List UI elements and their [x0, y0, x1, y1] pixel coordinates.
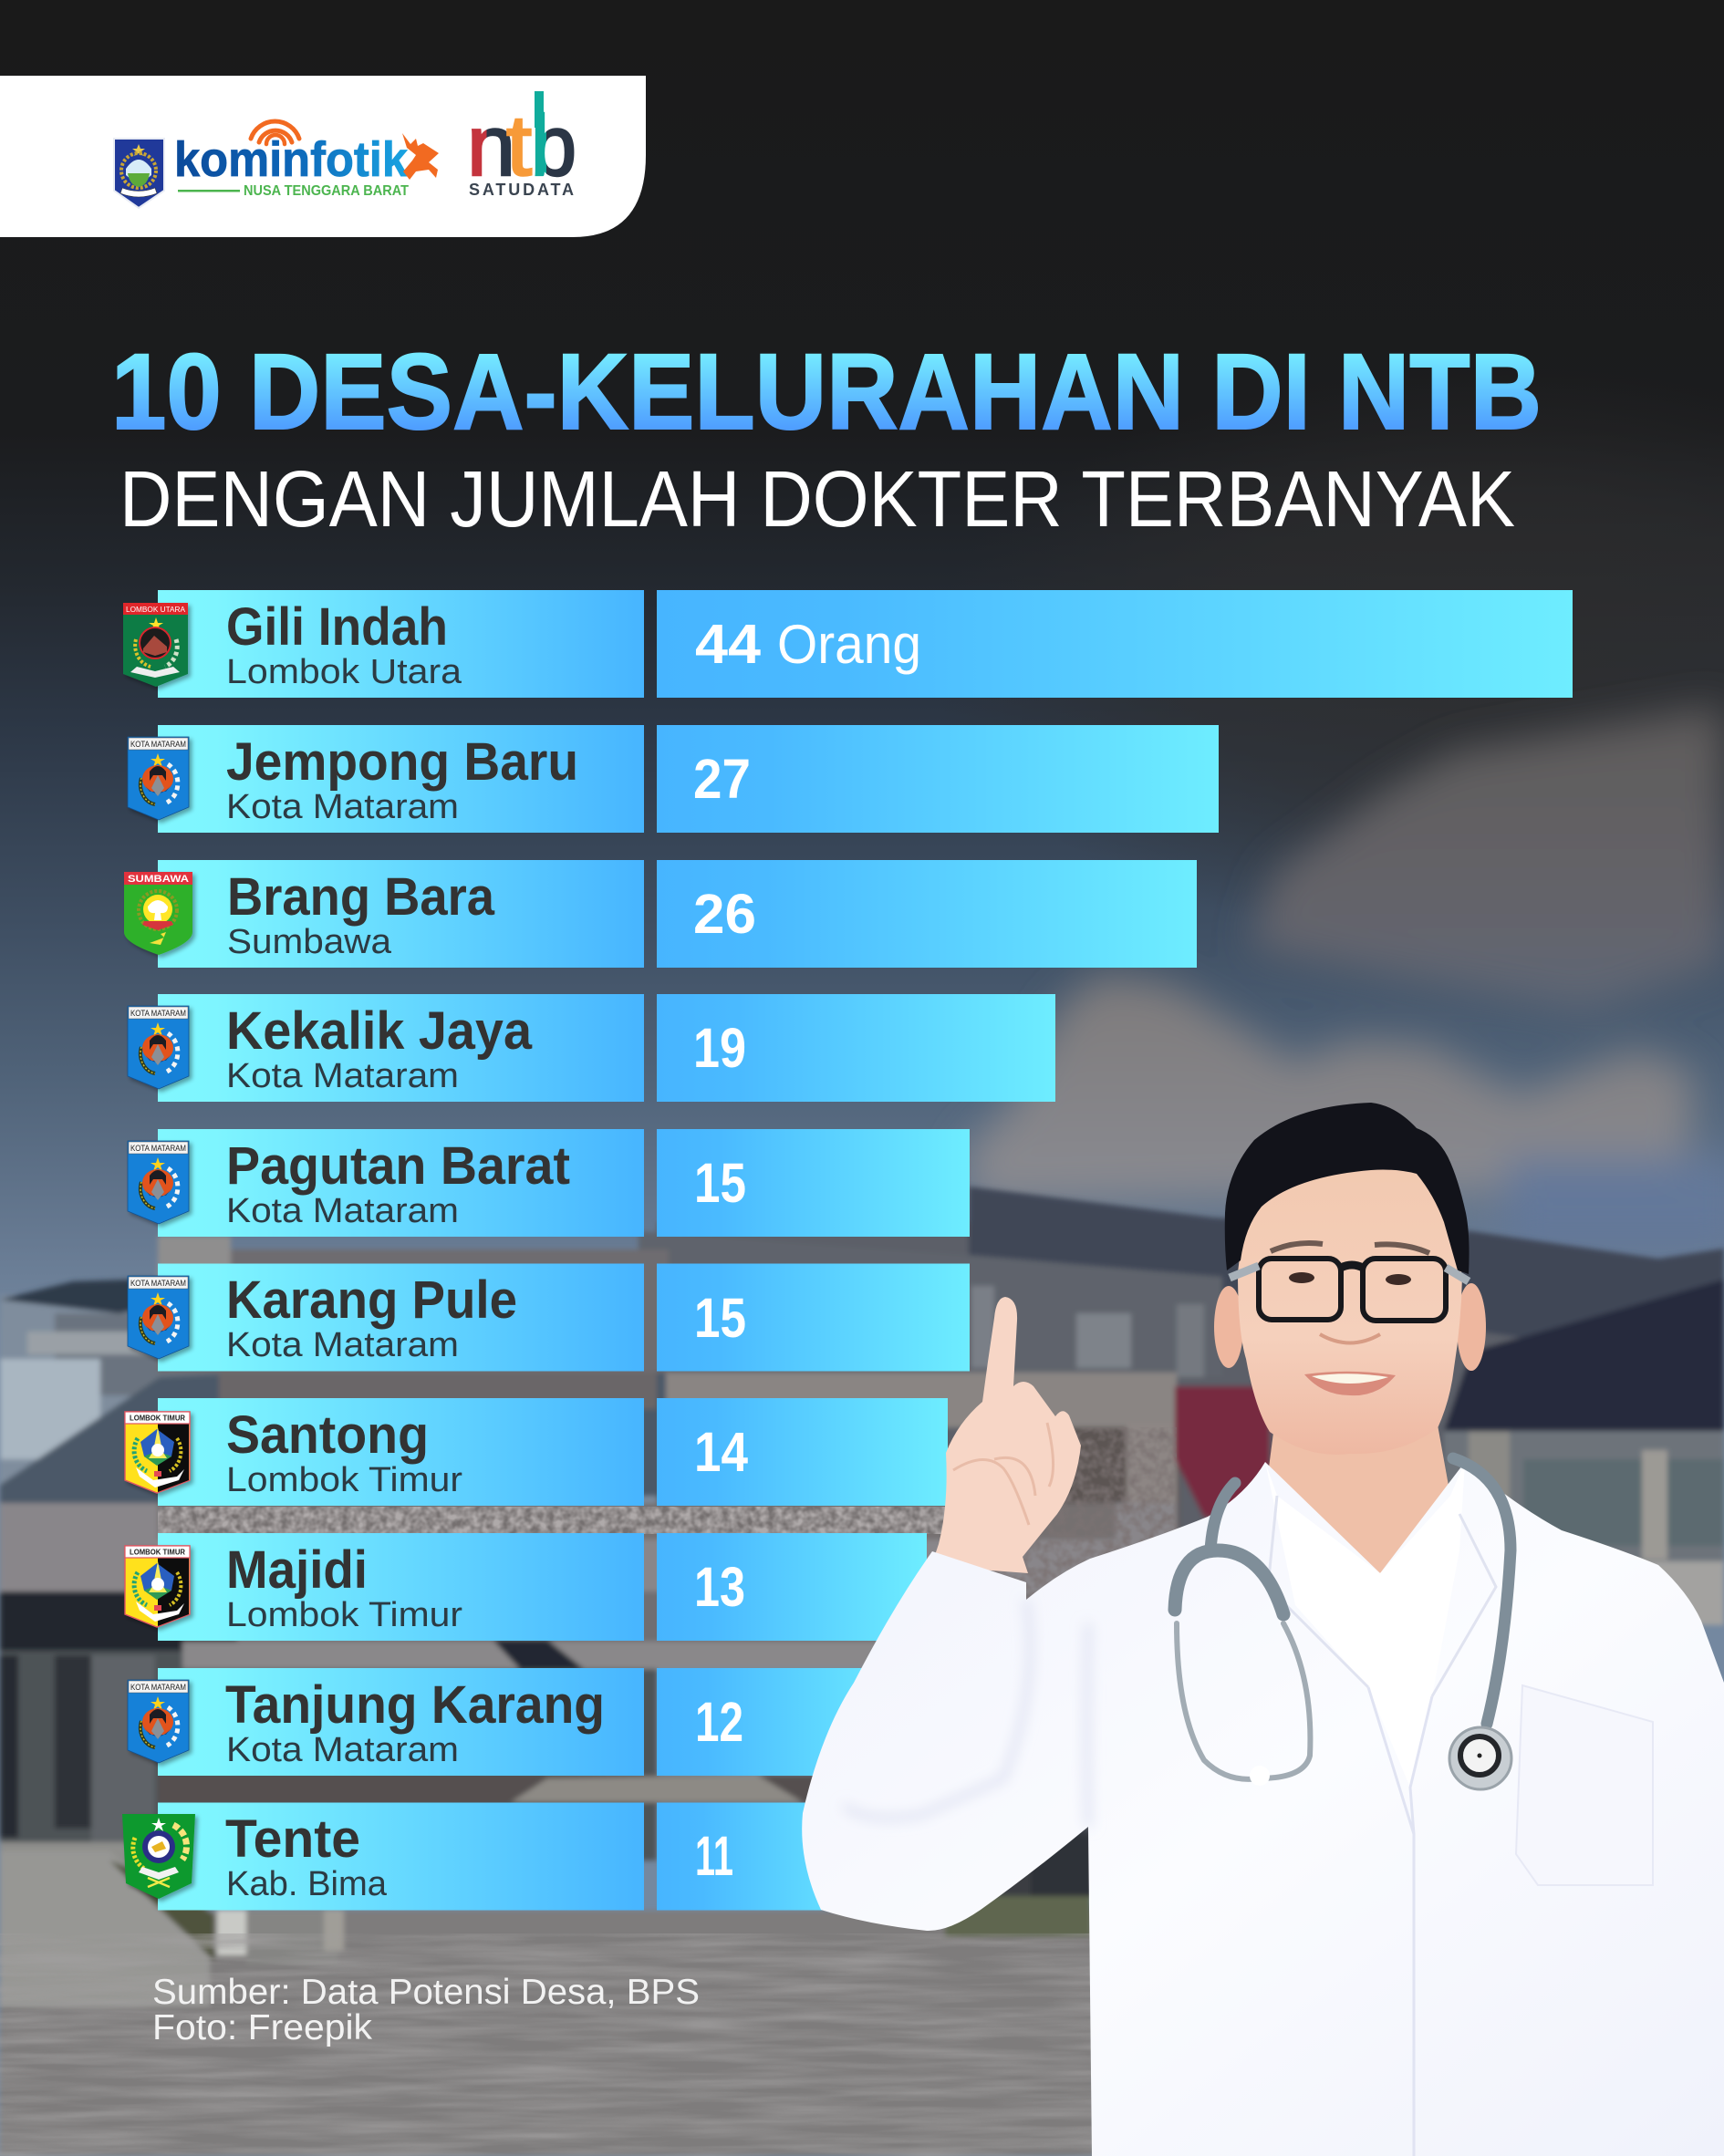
row 2: Jempong Baru	[128, 725, 1219, 833]
logo: ntb satudata: t	[506, 98, 532, 193]
value: 12	[695, 1691, 743, 1753]
eyes	[1289, 1272, 1314, 1283]
value: 44	[695, 613, 761, 675]
icon: Kota Mataram emblem: KOTA MATARAM	[130, 1009, 186, 1019]
icon: Kota Mataram emblem	[128, 1141, 189, 1224]
icon: Kota Mataram emblem: KOTA MATARAM	[130, 740, 186, 750]
icon: Kota Mataram emblem	[128, 737, 189, 820]
sublabel: Sumbawa	[227, 923, 392, 961]
row 5: Pagutan Barat	[128, 1129, 970, 1237]
stethoscope	[1175, 1458, 1511, 1789]
logo: ntb satudata: n	[467, 98, 515, 193]
icon: Lombok Timur emblem: LOMBOK TIMUR	[130, 1414, 185, 1423]
hand	[931, 1297, 1081, 1573]
value: 15	[694, 1287, 746, 1349]
icon: Kota Mataram emblem	[128, 1006, 189, 1089]
title: 10 DESA-KELURAHAN DI NTB	[111, 332, 1542, 452]
sleeve shading	[844, 1600, 1088, 1827]
glasses	[1230, 1259, 1469, 1321]
icon: Kota Mataram emblem: KOTA MATARAM	[130, 1144, 186, 1154]
header panel with logos	[0, 76, 646, 237]
row 9: Tanjung Karang	[128, 1668, 907, 1776]
logo: ntb satudata: b	[531, 98, 576, 193]
value: 13	[694, 1556, 745, 1618]
sublabel: Kota Mataram	[226, 1731, 459, 1769]
icon: NTB province emblem	[114, 139, 164, 208]
value: 27	[693, 748, 751, 810]
label: Gili Indah	[226, 597, 448, 657]
source text	[152, 1973, 700, 2047]
sublabel: Lombok Timur	[226, 1461, 462, 1499]
row 10: Tente	[122, 1802, 886, 1910]
source text: Sumber: Data Potensi Desa, BPS	[152, 1973, 700, 2012]
ears	[1214, 1286, 1243, 1368]
doctor figure	[802, 1103, 1724, 2156]
sublabel: Kota Mataram	[226, 1192, 459, 1230]
label: Pagutan Barat	[226, 1136, 570, 1196]
logo: ntb satudata: SATUDATA	[469, 181, 574, 199]
value: 14	[694, 1421, 748, 1483]
sublabel: Kota Mataram	[226, 1057, 459, 1095]
icon: Kota Mataram emblem: KOTA MATARAM	[130, 1279, 186, 1289]
row 1: Gili Indah	[123, 590, 1573, 698]
label: Tanjung Karang	[225, 1675, 605, 1735]
icon: Sumbawa emblem	[124, 872, 192, 955]
shirt	[1265, 1462, 1465, 1788]
icon: Lombok Utara emblem: LOMBOK UTARA	[126, 605, 185, 614]
mouth	[1304, 1372, 1396, 1395]
value: 15	[694, 1152, 746, 1214]
face	[1238, 1163, 1462, 1455]
sublabel: Lombok Timur	[226, 1596, 462, 1634]
building centre	[657, 1222, 1724, 1569]
label: Tente	[225, 1809, 360, 1869]
building left	[0, 1295, 657, 1505]
value: 19	[693, 1017, 746, 1079]
unit: Orang	[777, 614, 921, 675]
source text: Foto: Freepik	[152, 2008, 373, 2047]
label: Kekalik Jaya	[226, 1001, 533, 1061]
logo: ntb satudata	[467, 91, 576, 199]
lab coat	[802, 1462, 1724, 2156]
sublabel: Kota Mataram	[226, 1326, 459, 1364]
row 7: Santong	[125, 1398, 948, 1506]
eyebrows	[1271, 1243, 1429, 1253]
label: Majidi	[226, 1540, 368, 1600]
hair	[1225, 1103, 1470, 1274]
icon: Kota Mataram emblem	[128, 1276, 189, 1359]
logo line	[178, 190, 240, 192]
icon: Sumbawa emblem: SUMBAWA	[128, 874, 189, 885]
icon: Lombok Utara emblem	[123, 603, 188, 687]
icon: Lombok Timur emblem	[125, 1412, 190, 1493]
logo subtitle: NUSA TENGGARA BARAT	[244, 183, 409, 199]
icon: Lombok Timur emblem: LOMBOK TIMUR	[130, 1547, 185, 1556]
subtitle: DENGAN JUMLAH DOKTER TERBANYAK	[119, 455, 1515, 544]
neck	[1265, 1405, 1450, 1578]
nose	[1320, 1334, 1380, 1342]
icon: wifi arcs	[251, 121, 299, 144]
ground	[0, 1842, 158, 2156]
sublabel: Kab. Bima	[226, 1865, 388, 1903]
row 3: Brang Bara	[124, 860, 1197, 968]
row 6: Karang Pule	[128, 1264, 970, 1372]
label: Brang Bara	[227, 867, 495, 927]
icon: Kota Mataram emblem	[128, 1680, 189, 1763]
value: 26	[693, 883, 756, 945]
icon: Kota Mataram emblem: KOTA MATARAM	[130, 1683, 186, 1693]
icon: Lombok Timur emblem	[125, 1546, 190, 1627]
label: Karang Pule	[226, 1270, 517, 1330]
pocket	[1516, 1685, 1653, 1885]
logo text: kominfotik: kominfotik	[174, 132, 409, 187]
row 8: Majidi	[125, 1533, 927, 1641]
icon: deer	[402, 133, 439, 180]
label: Santong	[226, 1405, 429, 1465]
value: 11	[695, 1825, 733, 1887]
icon: Bima emblem	[122, 1814, 195, 1899]
sublabel: Lombok Utara	[226, 653, 462, 691]
sublabel: Kota Mataram	[226, 788, 459, 826]
label: Jempong Baru	[226, 732, 578, 792]
row 4: Kekalik Jaya	[128, 994, 1055, 1102]
